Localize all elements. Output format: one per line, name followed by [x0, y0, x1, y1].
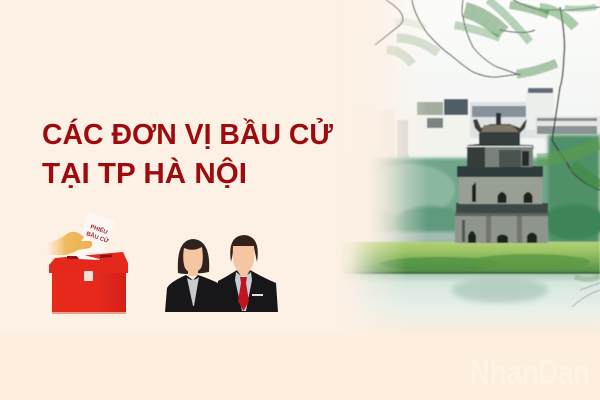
ballot slot: [67, 254, 112, 259]
box lid: [49, 252, 128, 273]
ballot paper: BẦU CỬ: [85, 230, 110, 245]
lower background band: [0, 334, 600, 400]
buildings: [357, 88, 600, 160]
paper lower edge: [75, 253, 100, 260]
upper photo fade: [338, 0, 428, 243]
title: TẠI TP HÀ NỘI: [42, 156, 247, 190]
distant trees: [340, 135, 600, 243]
tower arches: [468, 182, 537, 243]
photo: Hoan Kiem lake and Turtle Tower: [336, 0, 600, 340]
icon: two officials: [165, 235, 278, 312]
box body: [52, 273, 126, 313]
woman: [165, 239, 226, 312]
title: CÁC ĐƠN VỊ BẦU CỬ: [42, 117, 334, 151]
water reflection: [452, 277, 548, 303]
foreground leaves: [387, 0, 600, 279]
tower base: [455, 215, 548, 243]
ballot paper: [75, 212, 115, 259]
water: [340, 273, 600, 335]
box shadow: [52, 312, 126, 314]
grass bank: [340, 242, 600, 274]
box lock: [84, 271, 93, 281]
sky: [340, 0, 600, 170]
hand: [47, 232, 92, 255]
Turtle Tower: [455, 113, 549, 243]
title: [42, 117, 334, 190]
icon: ballot box with hand: [47, 212, 128, 314]
photo left fade: [336, 0, 406, 340]
lake twigs: [572, 283, 600, 307]
man: [216, 235, 278, 312]
ballot paper: PHIẾU: [89, 223, 108, 236]
foreground branches: [375, 0, 600, 190]
